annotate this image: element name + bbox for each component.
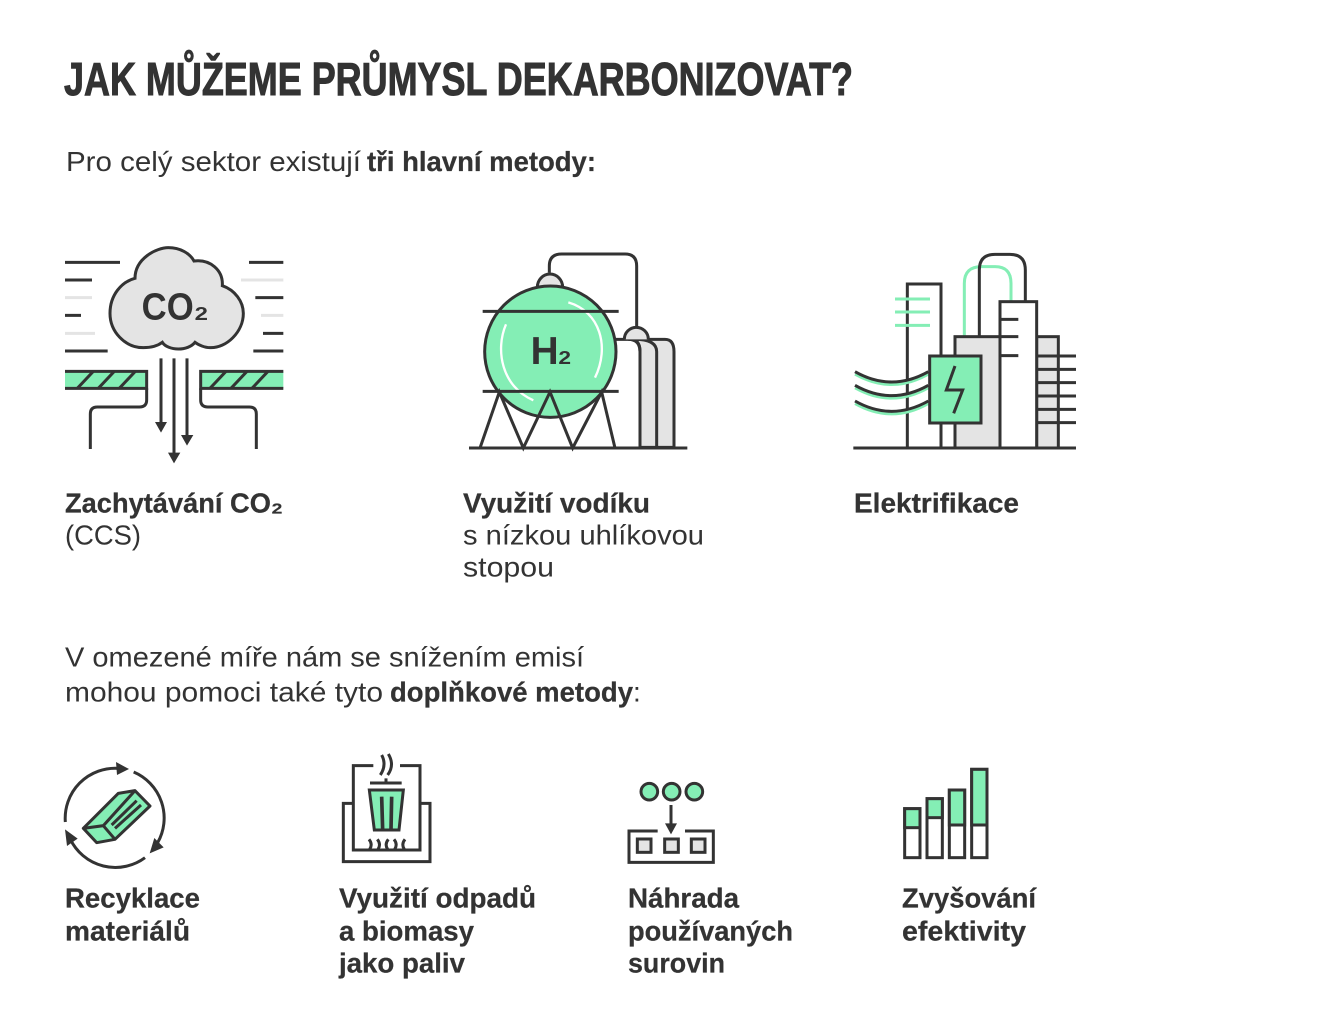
label: waste and biomass: Využití odpadů [339,882,536,914]
label: hydrogen: stopou [463,552,554,582]
icon: efficiency bars [905,769,987,858]
label: hydrogen: Využití vodíku [463,488,650,518]
title: JAK MŮŽEME PRŮMYSL DEKARBONIZOVAT? [64,50,853,105]
label: waste and biomass: a biomasy [339,916,474,946]
intro text [66,146,596,177]
icon: hydrogen tank [469,254,687,448]
label: CO2 capture: (CCS) [65,520,141,550]
label: hydrogen [463,488,704,582]
secondary intro text: V omezené míře nám se snížením emisí [65,642,584,672]
label: raw materials [628,882,793,978]
label: raw materials: Náhrada [628,882,739,914]
label: recycling: materiálů [65,916,190,946]
icon: electrified factory [853,254,1076,448]
icon: CO2 capture: 2 [195,303,208,324]
label: recycling: Recyklace [65,882,200,914]
icon: hydrogen tank: H [531,330,559,373]
label: hydrogen: s nízkou uhlíkovou [463,520,704,550]
label: waste and biomass [338,882,536,978]
label: waste and biomass: jako paliv [338,948,465,978]
label: efficiency: efektivity [902,916,1026,946]
icon: recycling [65,762,164,867]
label: recycling [65,882,200,946]
secondary intro text [65,642,641,708]
icon: hydrogen tank: 2 [558,347,571,368]
icon: waste furnace [343,754,430,862]
icon: CO2 capture [65,248,283,463]
label: efficiency: Zvyšování [902,882,1037,914]
label: CO2 capture [65,488,283,550]
icon: CO2 capture: CO [142,287,194,329]
label: raw materials: používaných [628,916,793,946]
secondary intro text: mohou pomoci také tyto [65,676,383,708]
secondary intro text: doplňkové metody [390,676,633,708]
label: CO2 capture: Zachytávání CO₂ [65,488,283,518]
label: efficiency [902,882,1037,946]
label: electrification: Elektrifikace [854,488,1019,518]
icon: raw material substitution [629,783,713,862]
secondary intro text: : [633,676,641,708]
label: raw materials: surovin [628,948,725,978]
intro text: tři hlavní metody: [367,146,596,177]
intro text: Pro celý sektor existují [66,146,361,177]
